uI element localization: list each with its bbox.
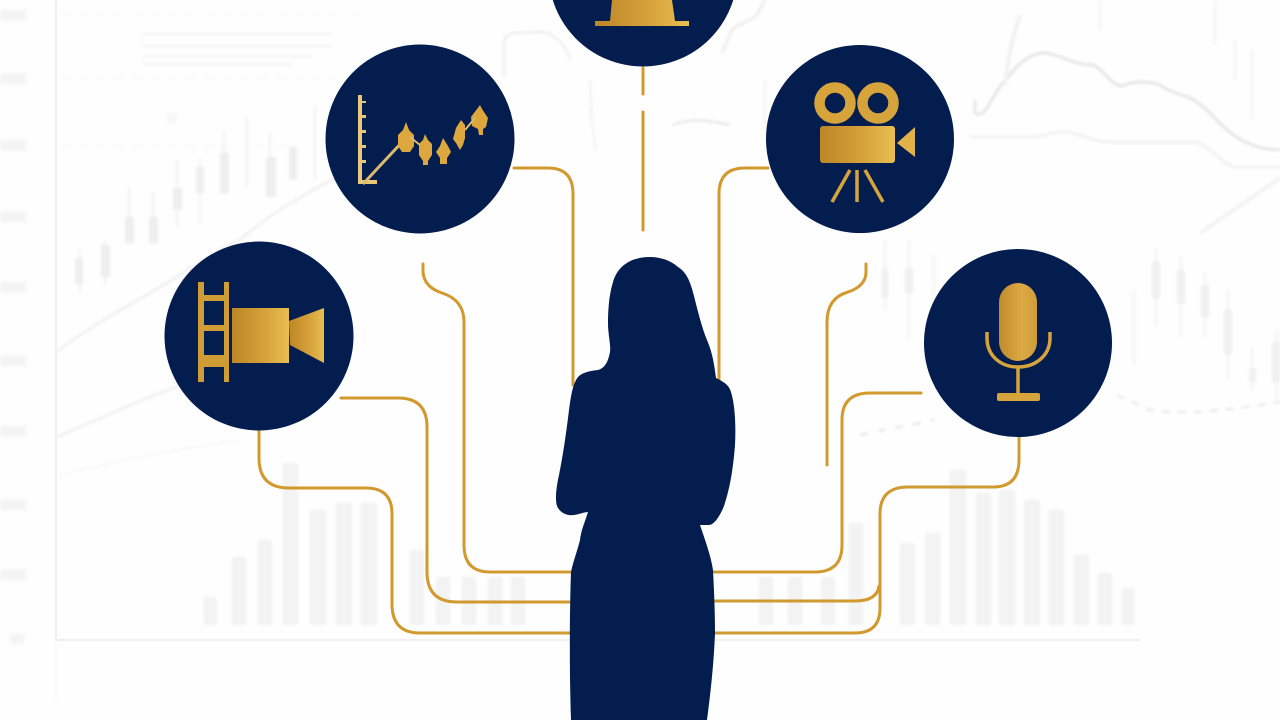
background: volume bars left (204, 463, 525, 625)
connector: microphone to figure (bottom) (714, 438, 1019, 633)
circle icon: top podium (548, 0, 738, 66)
podium (595, 0, 689, 26)
lens (897, 127, 915, 157)
connector: video camera to figure (upper) (719, 168, 768, 380)
tripod (832, 170, 883, 202)
connector: microphone branch (714, 586, 879, 601)
connector: chart to figure (lower) (423, 264, 575, 572)
background: candlesticks right (882, 0, 1280, 400)
connector: top circle dashed (642, 68, 644, 230)
film strip (198, 282, 229, 382)
camera body (820, 126, 895, 163)
camera body (232, 308, 289, 363)
circle icon: video camera on tripod (766, 45, 954, 233)
circle icon: film camera (164, 242, 354, 430)
connector: film camera to figure (bottom) (259, 431, 575, 633)
background: volume bars right (759, 470, 1134, 625)
circle icon: microphone (924, 249, 1112, 437)
mic cradle and stem (987, 332, 1050, 396)
mic base (997, 393, 1040, 401)
candles (398, 105, 488, 165)
capsule (999, 283, 1037, 361)
background: candlesticks left (75, 105, 315, 292)
connector: video camera lower (827, 264, 866, 465)
chart axes (358, 95, 377, 184)
connector: chart to figure (upper) (514, 168, 573, 385)
circle icon: candlestick chart (326, 44, 514, 234)
connector: microphone to figure (middle) (714, 393, 921, 572)
connector: film camera to figure (middle) (341, 398, 575, 602)
trend arrow (363, 140, 404, 184)
camera lens (289, 308, 324, 363)
background: trend lines (56, 0, 1280, 475)
film reels (820, 88, 894, 118)
connector lines (259, 68, 1019, 633)
silhouette: woman (556, 257, 735, 720)
